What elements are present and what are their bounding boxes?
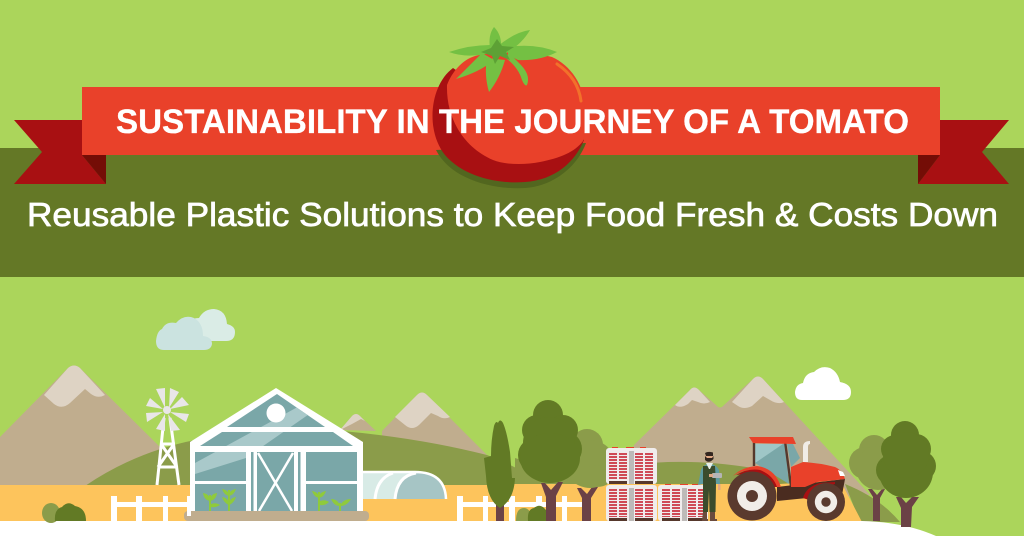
fence: left xyxy=(111,496,191,521)
crate right xyxy=(658,484,708,521)
front wheel xyxy=(807,483,845,521)
centre mountains xyxy=(340,392,490,470)
tree: right light xyxy=(849,435,900,521)
rear wheel xyxy=(728,472,776,520)
seedlings xyxy=(203,489,351,511)
tree: dark left of crates xyxy=(518,400,582,521)
tree: cypress xyxy=(484,420,515,521)
header band xyxy=(0,148,1024,277)
tractor xyxy=(728,437,845,521)
crate top xyxy=(606,447,657,484)
ribbon tail: right xyxy=(918,120,1009,184)
icon: polytunnel xyxy=(362,471,447,499)
tree: light behind crates xyxy=(565,429,615,521)
left mountain xyxy=(0,366,160,490)
tree: right dark xyxy=(876,421,936,527)
subtitle: Reusable Plastic Solutions to Keep Food Fresh & Costs Down xyxy=(27,196,998,233)
cloud: white xyxy=(795,367,851,400)
farmland ground xyxy=(0,480,862,522)
ribbon tail: left xyxy=(14,120,106,184)
icon: tomato xyxy=(433,27,586,188)
fence: centre xyxy=(457,496,582,521)
crates stack xyxy=(606,447,708,521)
ribbon banner xyxy=(82,87,940,155)
right mountains xyxy=(620,376,870,500)
icon: windmill xyxy=(146,388,189,485)
crate bottom xyxy=(606,485,657,521)
green hills xyxy=(85,431,900,522)
cloud: blue-grey pair xyxy=(156,309,235,350)
title: SUSTAINABILITY IN THE JOURNEY OF A TOMATO xyxy=(116,103,909,141)
farmer xyxy=(698,452,722,521)
bush: left xyxy=(42,503,86,523)
bush: centre xyxy=(516,506,548,521)
white foreground xyxy=(0,521,936,536)
greenhouse xyxy=(184,388,369,521)
